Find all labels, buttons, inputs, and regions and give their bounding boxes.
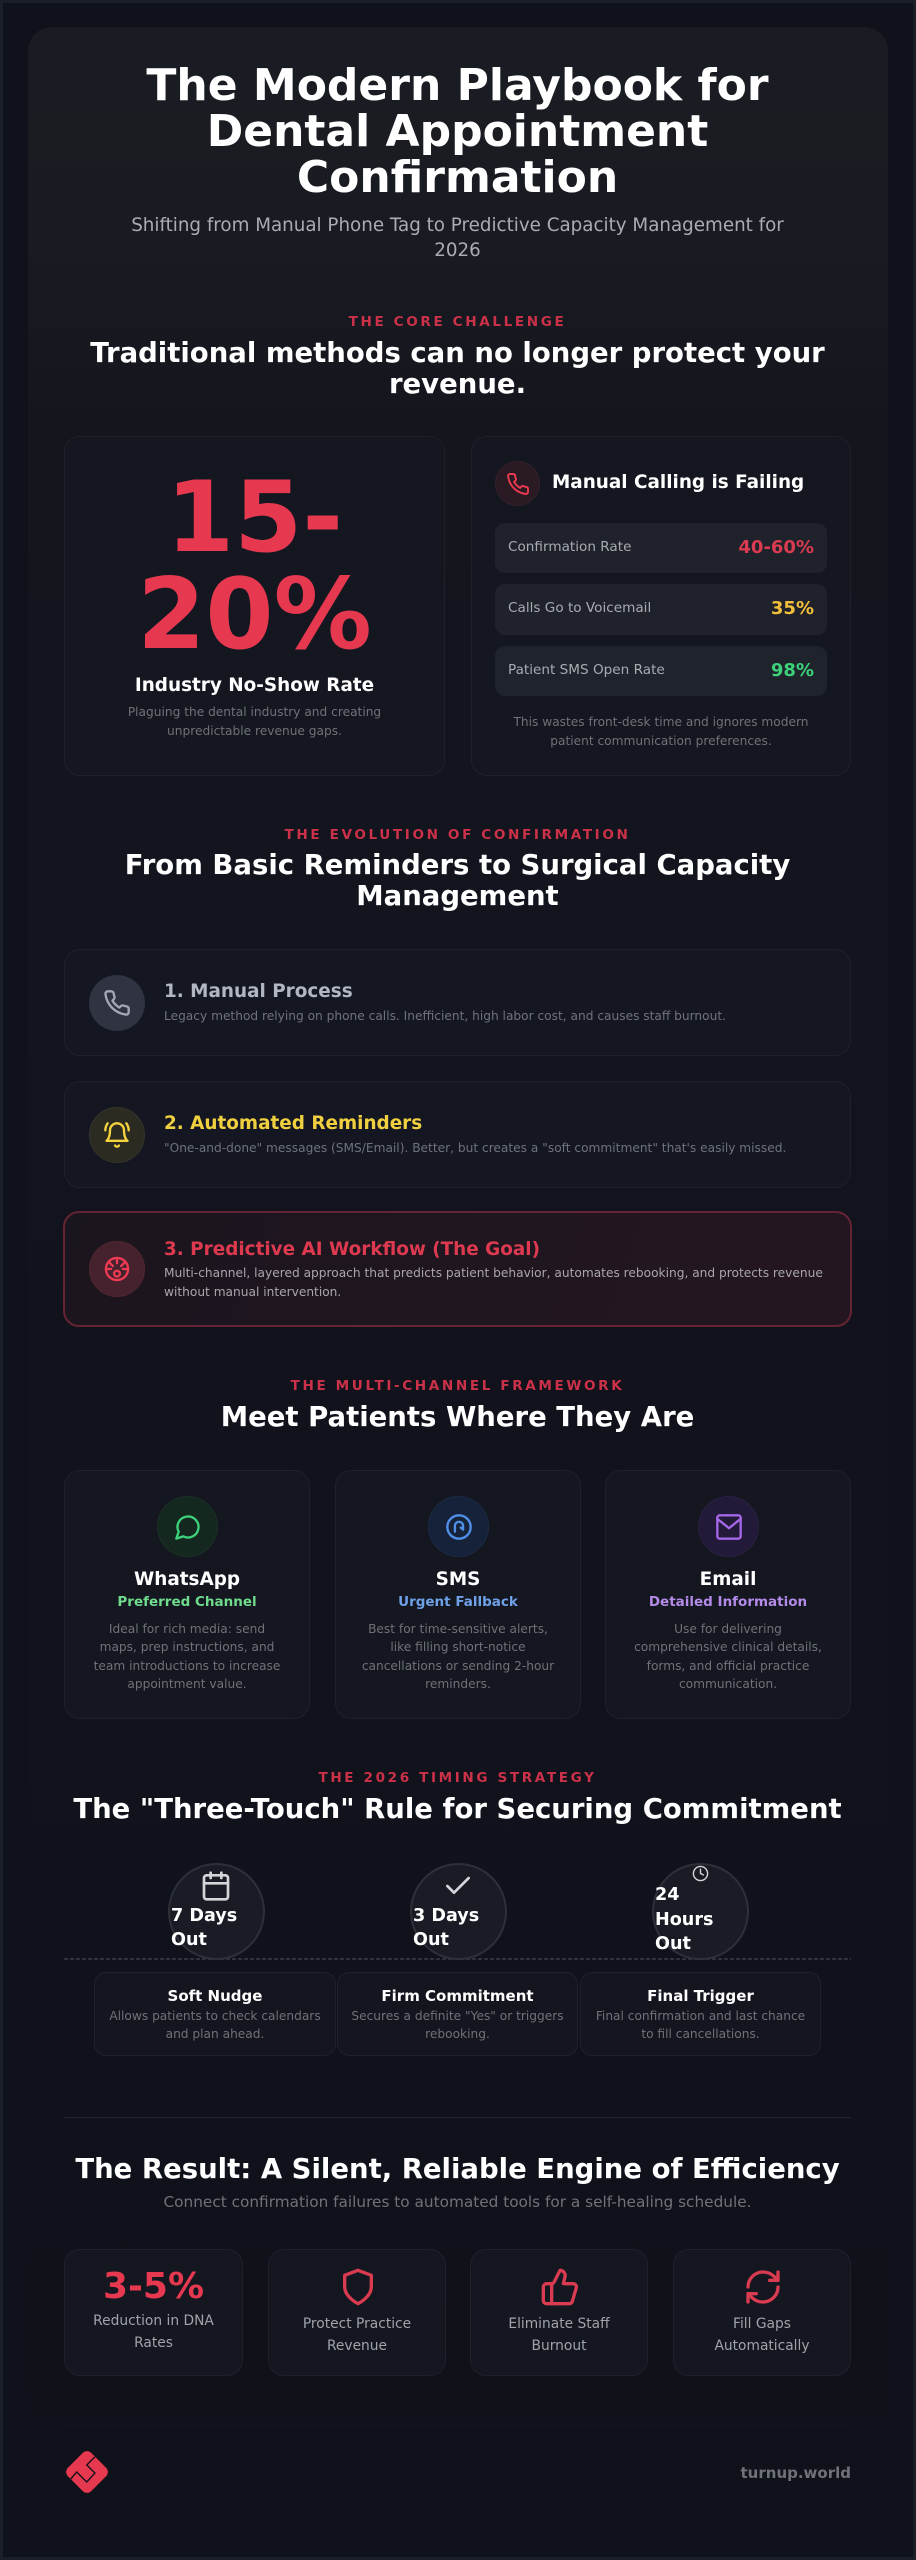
row label: Patient SMS Open Rate bbox=[508, 662, 665, 678]
step description: "One-and-done" messages (SMS/Email). Better, but creates a "soft commitment" that's easily missed. bbox=[164, 1141, 786, 1155]
heading: The "Three-Touch" Rule for Securing Commitment bbox=[73, 1793, 842, 1825]
section heading: timing strategy bbox=[73, 1770, 842, 1825]
icon: phone bbox=[89, 975, 145, 1031]
heading: Meet Patients Where They Are bbox=[221, 1401, 694, 1433]
panel title: Manual Calling is Failing bbox=[552, 472, 804, 493]
eyebrow label: THE EVOLUTION OF CONFIRMATION bbox=[285, 827, 630, 843]
stat label bbox=[93, 2313, 214, 2350]
panel: step 2 automated reminders bbox=[64, 1081, 851, 1188]
stat: 3-5% bbox=[103, 2266, 204, 2307]
section subtitle: Connect confirmation failures to automated tools for a self-healing schedule. bbox=[163, 2193, 752, 2211]
panel: step 1 manual process bbox=[64, 949, 851, 1056]
icon: bell bbox=[89, 1107, 145, 1163]
card description: and plan ahead. bbox=[166, 2027, 264, 2041]
card description: Final confirmation and last chance bbox=[596, 2009, 805, 2023]
title: The Modern Playbook for bbox=[146, 60, 769, 111]
card label: Fill Gaps bbox=[733, 2316, 791, 2332]
icon: thumbs up bbox=[542, 2268, 578, 2306]
panel: no-show rate stat bbox=[64, 436, 445, 776]
channel role: Urgent Fallback bbox=[398, 1594, 518, 1610]
card title: Soft Nudge bbox=[168, 1987, 262, 2005]
card description bbox=[109, 2009, 321, 2041]
stat description bbox=[128, 705, 381, 738]
card label bbox=[303, 2316, 411, 2354]
row: sms open rate bbox=[495, 646, 827, 696]
card label bbox=[508, 2316, 610, 2354]
step description bbox=[164, 1266, 823, 1298]
step title: 1. Manual Process bbox=[164, 981, 353, 1002]
channel description: communication. bbox=[679, 1677, 777, 1691]
channel description: Best for time-sensitive alerts, bbox=[368, 1622, 548, 1636]
channel role: Preferred Channel bbox=[117, 1594, 257, 1610]
icon: check bbox=[446, 1876, 470, 1894]
heading bbox=[125, 849, 790, 912]
card title: Final Trigger bbox=[647, 1987, 754, 2005]
icon: clock bbox=[692, 1866, 708, 1882]
timeline dashed line bbox=[64, 1958, 851, 1960]
card description bbox=[351, 2009, 564, 2041]
result card: protect revenue bbox=[268, 2249, 446, 2376]
heading: revenue. bbox=[389, 368, 526, 400]
channel description: forms, and official practice bbox=[647, 1659, 809, 1673]
panel: email bbox=[605, 1470, 851, 1719]
result card: fill gaps bbox=[673, 2249, 851, 2376]
channel name: WhatsApp bbox=[134, 1569, 240, 1590]
heading: From Basic Reminders to Surgical Capacity bbox=[125, 849, 790, 881]
section heading: the core challenge bbox=[90, 314, 825, 400]
stat label: Industry No-Show Rate bbox=[135, 675, 374, 696]
title bbox=[146, 60, 769, 203]
card label bbox=[714, 2316, 810, 2354]
subtitle: 2026 bbox=[434, 240, 481, 261]
subtitle bbox=[131, 215, 784, 261]
heading: The Result: A Silent, Reliable Engine of Efficiency bbox=[75, 2153, 840, 2185]
title: Dental Appointment bbox=[207, 106, 708, 157]
card description: Secures a definite "Yes" or triggers bbox=[351, 2009, 564, 2023]
icon: message bubble bbox=[157, 1496, 218, 1557]
channel description bbox=[362, 1622, 554, 1691]
icon: refresh bbox=[746, 2270, 780, 2304]
big stat bbox=[137, 461, 372, 672]
result card: 3-5% reduction bbox=[64, 2249, 243, 2376]
channel description: Ideal for rich media: send bbox=[109, 1622, 265, 1636]
channel name: SMS bbox=[436, 1569, 480, 1590]
eyebrow label: THE MULTI-CHANNEL FRAMEWORK bbox=[291, 1378, 624, 1394]
node label bbox=[413, 1906, 479, 1950]
heading bbox=[90, 337, 825, 400]
footnote: This wastes front-desk time and ignores modern bbox=[513, 715, 809, 729]
subtitle: Shifting from Manual Phone Tag to Predictive Capacity Management for bbox=[131, 215, 784, 236]
timeline node: 7 days out bbox=[168, 1863, 265, 1960]
channel description bbox=[94, 1622, 280, 1691]
node label: 24 bbox=[655, 1885, 679, 1905]
node label: Out bbox=[655, 1934, 691, 1954]
panel: step 3 predictive ai workflow bbox=[63, 1211, 852, 1327]
footer website: turnup.world bbox=[741, 2464, 851, 2482]
icon: phone bbox=[495, 461, 540, 506]
channel description: comprehensive clinical details, bbox=[634, 1640, 822, 1654]
header: title and subtitle bbox=[131, 60, 784, 261]
channel description bbox=[634, 1622, 822, 1691]
stat description: Plaguing the dental industry and creating bbox=[128, 705, 381, 719]
card label: Eliminate Staff bbox=[508, 2316, 610, 2332]
card description: to fill cancellations. bbox=[641, 2027, 760, 2041]
card label: Automatically bbox=[714, 2338, 810, 2354]
step title: 3. Predictive AI Workflow (The Goal) bbox=[164, 1239, 540, 1260]
timeline node: 24 hours out bbox=[652, 1863, 749, 1960]
row value: 35% bbox=[771, 598, 814, 619]
heading: Traditional methods can no longer protect your bbox=[90, 337, 825, 369]
node label bbox=[171, 1906, 237, 1950]
eyebrow label: THE CORE CHALLENGE bbox=[349, 314, 566, 330]
node label: 3 Days bbox=[413, 1906, 479, 1926]
node label: 7 Days bbox=[171, 1906, 237, 1926]
big stat: 20% bbox=[137, 558, 372, 672]
card: final trigger bbox=[580, 1972, 821, 2056]
stat label: Rates bbox=[134, 2334, 173, 2350]
stat label: Reduction in DNA bbox=[93, 2313, 214, 2329]
channel name: Email bbox=[700, 1569, 756, 1590]
node label: Out bbox=[413, 1930, 449, 1950]
channel description: maps, prep instructions, and bbox=[100, 1640, 274, 1654]
channel description: reminders. bbox=[425, 1677, 491, 1691]
row value: 98% bbox=[771, 660, 814, 681]
eyebrow label: THE 2026 TIMING STRATEGY bbox=[318, 1770, 597, 1786]
result card: eliminate burnout bbox=[470, 2249, 648, 2376]
card description: Allows patients to check calendars bbox=[109, 2009, 321, 2023]
channel description: Use for delivering bbox=[674, 1622, 782, 1636]
card description: rebooking. bbox=[425, 2027, 490, 2041]
footer logo bbox=[66, 2451, 108, 2493]
stat description: unpredictable revenue gaps. bbox=[167, 724, 342, 738]
icon: sms circle arrow bbox=[428, 1496, 489, 1557]
title: Confirmation bbox=[297, 152, 618, 203]
card label: Burnout bbox=[532, 2338, 586, 2354]
node label: Hours bbox=[655, 1910, 714, 1930]
card: soft nudge bbox=[94, 1972, 336, 2056]
heading: Management bbox=[356, 880, 559, 912]
channel description: like filling short-notice bbox=[390, 1640, 526, 1654]
panel: whatsapp bbox=[64, 1470, 310, 1719]
row label: Confirmation Rate bbox=[508, 539, 631, 555]
row: voicemail bbox=[495, 584, 827, 635]
row value: 40-60% bbox=[738, 537, 814, 558]
step description: Legacy method relying on phone calls. Inefficient, high labor cost, and causes staff burnout. bbox=[164, 1009, 726, 1023]
section heading: multi-channel framework bbox=[221, 1378, 694, 1433]
footnote bbox=[513, 715, 809, 748]
panel: sms bbox=[335, 1470, 581, 1719]
section heading: evolution of confirmation bbox=[125, 827, 790, 912]
icon: envelope bbox=[698, 1496, 759, 1557]
icon: shield bbox=[343, 2268, 373, 2306]
step title: 2. Automated Reminders bbox=[164, 1113, 422, 1134]
card description bbox=[596, 2009, 805, 2041]
card label: Revenue bbox=[327, 2338, 387, 2354]
panel: manual calling is failing bbox=[471, 436, 851, 776]
node label: Out bbox=[171, 1930, 207, 1950]
row: confirmation rate bbox=[495, 523, 827, 573]
section heading: the result bbox=[75, 2153, 840, 2211]
icon: calendar bbox=[202, 1871, 230, 1901]
channel role: Detailed Information bbox=[649, 1594, 807, 1610]
row label: Calls Go to Voicemail bbox=[508, 600, 651, 616]
node label bbox=[655, 1885, 714, 1954]
channel description: team introductions to increase bbox=[94, 1659, 280, 1673]
footnote: patient communication preferences. bbox=[550, 734, 772, 748]
timeline node: 3 days out bbox=[410, 1863, 507, 1960]
channel description: appointment value. bbox=[127, 1677, 247, 1691]
big stat: 15- bbox=[166, 461, 343, 575]
step description: without manual intervention. bbox=[164, 1284, 341, 1298]
icon: ai gear bbox=[89, 1241, 145, 1297]
card label: Protect Practice bbox=[303, 2316, 411, 2332]
card title: Firm Commitment bbox=[381, 1987, 534, 2005]
step description: Multi-channel, layered approach that predicts patient behavior, automates rebooking, and protects revenue bbox=[164, 1266, 823, 1280]
card: firm commitment bbox=[337, 1972, 578, 2056]
channel description: cancellations or sending 2-hour bbox=[362, 1659, 554, 1673]
